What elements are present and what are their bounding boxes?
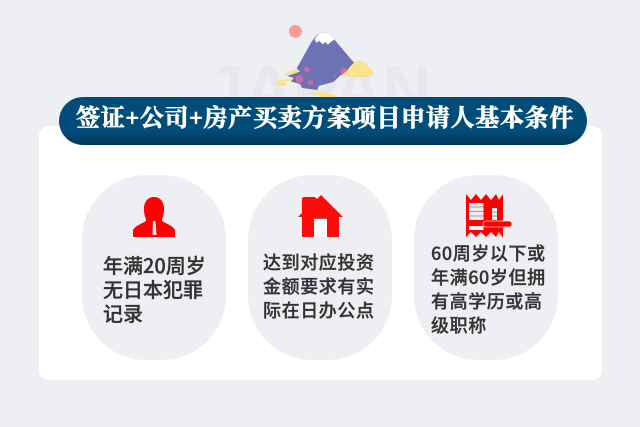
text: requirement 1 (103, 250, 206, 327)
icon: water waves (274, 69, 339, 97)
JAPAN watermark: JAPAN (206, 52, 431, 128)
panel: no criminal record (82, 175, 226, 360)
text: requirement 1: 无日本犯罪 (103, 274, 203, 303)
icon: mount fuji (287, 32, 354, 90)
icon: yellow cloud (339, 61, 373, 77)
panel: investment and office (248, 175, 392, 360)
text: requirement 2: 金额要求有实 (263, 273, 375, 299)
text: requirement 2: 际在日办公点 (263, 297, 375, 323)
icon: house (298, 195, 343, 237)
text: requirement 3 (431, 240, 546, 338)
white content card (39, 126, 602, 380)
icon: person (133, 197, 175, 237)
icon: certificate (466, 194, 512, 238)
text: requirement 3: 级职称 (431, 312, 487, 338)
title: 签证+公司+房产买卖方案项目申请人基本条件 (76, 106, 574, 132)
panel: age and education (414, 175, 558, 360)
text: requirement 3: 年满60岁但拥 (431, 264, 546, 290)
title banner (59, 97, 587, 145)
icon: sun (289, 25, 302, 38)
text: requirement 2: 达到对应投资 (263, 249, 375, 275)
text: requirement 1: 年满20周岁 (103, 250, 206, 279)
text: requirement 2 (263, 249, 375, 323)
text: requirement 1: 记录 (103, 298, 143, 327)
text: requirement 3: 有高学历或高 (431, 288, 543, 314)
mountain illustration (274, 24, 373, 97)
text: requirement 3: 60周岁以下或 (431, 240, 546, 266)
